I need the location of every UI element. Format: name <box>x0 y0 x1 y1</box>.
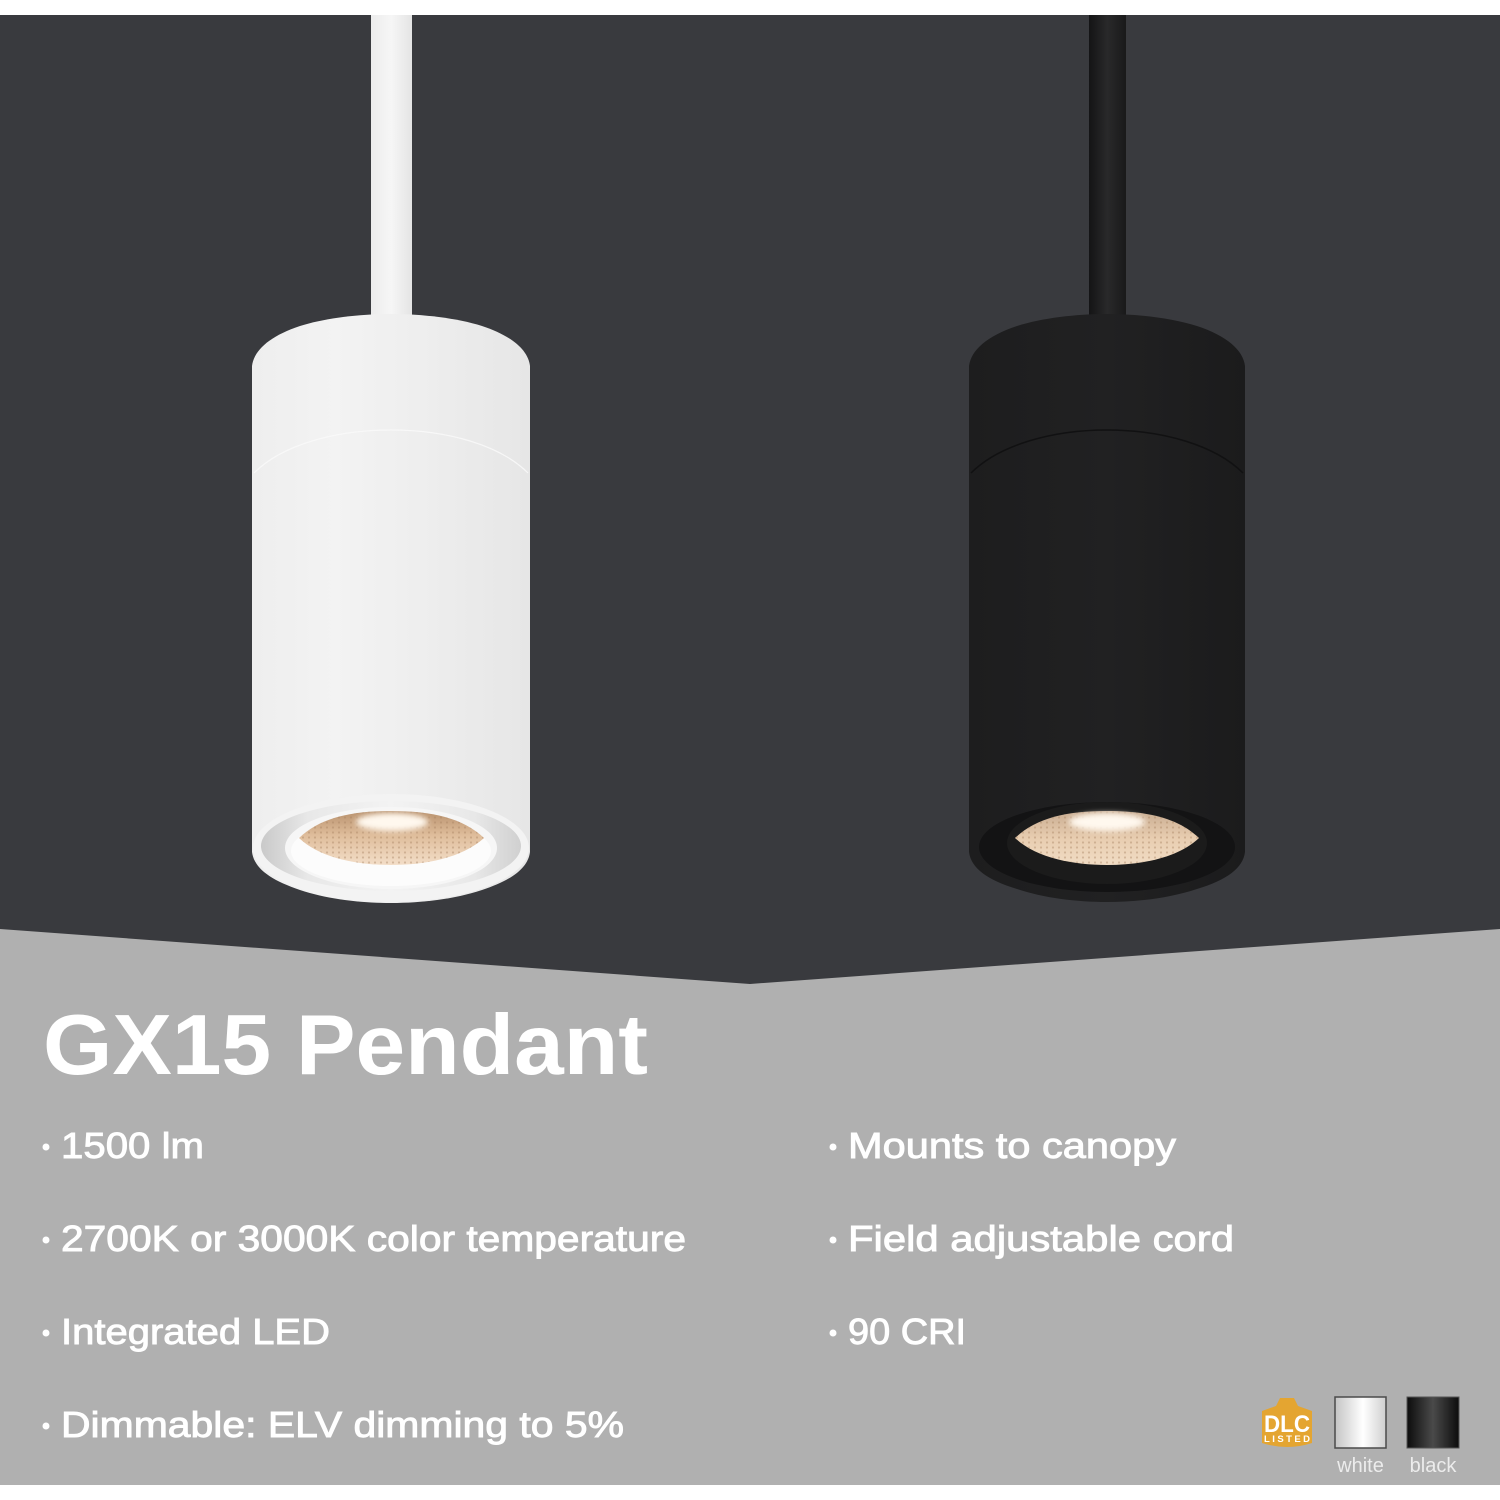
bullet: integrated LED: Integrated LED <box>61 1311 330 1352</box>
white pendant joint line <box>254 430 528 473</box>
white pendant lens <box>299 811 484 865</box>
icon: DLC listed badge <box>1262 1398 1312 1447</box>
swatch: black finish <box>1407 1397 1459 1477</box>
swatch: white finish: white <box>1336 1455 1384 1477</box>
bullet: adjustable cord: Field adjustable cord <box>848 1218 1234 1259</box>
title: GX15 Pendant <box>43 998 648 1093</box>
black pendant joint line <box>971 430 1243 473</box>
bullet: lumens: 1500 lm <box>61 1125 204 1166</box>
black pendant body <box>969 314 1245 902</box>
swatch: white finish <box>1335 1397 1386 1477</box>
feature list: left column <box>42 1125 686 1445</box>
black pendant cord <box>1089 15 1126 317</box>
swatch: black finish: black <box>1410 1455 1457 1477</box>
icon: DLC listed badge: LISTED <box>1264 1434 1310 1445</box>
bullet: canopy mount: Mounts to canopy <box>848 1125 1177 1166</box>
bullet: color temperature: 2700K or 3000K color temperature <box>61 1218 686 1259</box>
white pendant cord <box>371 15 412 317</box>
white pendant bottom trim <box>253 794 529 902</box>
white pendant body <box>252 314 530 903</box>
feature list: right column <box>830 1125 1234 1352</box>
white pendant light <box>252 15 530 903</box>
black pendant lens <box>1015 811 1199 865</box>
black pendant light <box>969 15 1245 902</box>
grey info panel <box>0 929 1500 1485</box>
black pendant bottom trim <box>979 802 1235 892</box>
bullet: CRI: 90 CRI <box>848 1311 966 1352</box>
bullet: dimmable: Dimmable: ELV dimming to 5% <box>61 1404 624 1445</box>
icon: DLC listed badge: DLC <box>1264 1411 1310 1438</box>
dark background panel <box>0 15 1500 985</box>
